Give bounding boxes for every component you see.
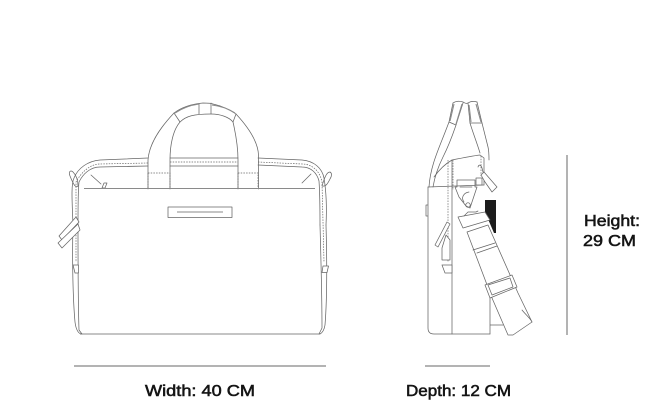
side view of bag xyxy=(426,101,532,335)
depth measure line xyxy=(425,365,490,367)
width measure line xyxy=(74,365,326,367)
width label: Width: 40 CM xyxy=(145,383,255,400)
black hang tag xyxy=(485,200,496,233)
front view of bag xyxy=(58,103,332,334)
side zipper pull upper xyxy=(476,165,497,192)
height label xyxy=(583,213,640,250)
side zipper pull lower xyxy=(435,222,452,273)
height measure line xyxy=(566,155,568,335)
height label: Height: xyxy=(584,213,640,230)
brand label xyxy=(168,207,232,218)
body outline xyxy=(73,188,327,334)
height label: 29 CM xyxy=(583,233,636,250)
front handle xyxy=(148,103,258,189)
top zipper band xyxy=(72,158,326,262)
shoulder strap xyxy=(458,211,532,335)
side handle xyxy=(429,101,489,187)
depth label: Depth: 12 CM xyxy=(406,383,511,400)
right zipper pull xyxy=(322,172,332,272)
left zipper pull xyxy=(58,171,80,273)
side body xyxy=(426,155,503,334)
clip and hardware xyxy=(455,180,477,208)
